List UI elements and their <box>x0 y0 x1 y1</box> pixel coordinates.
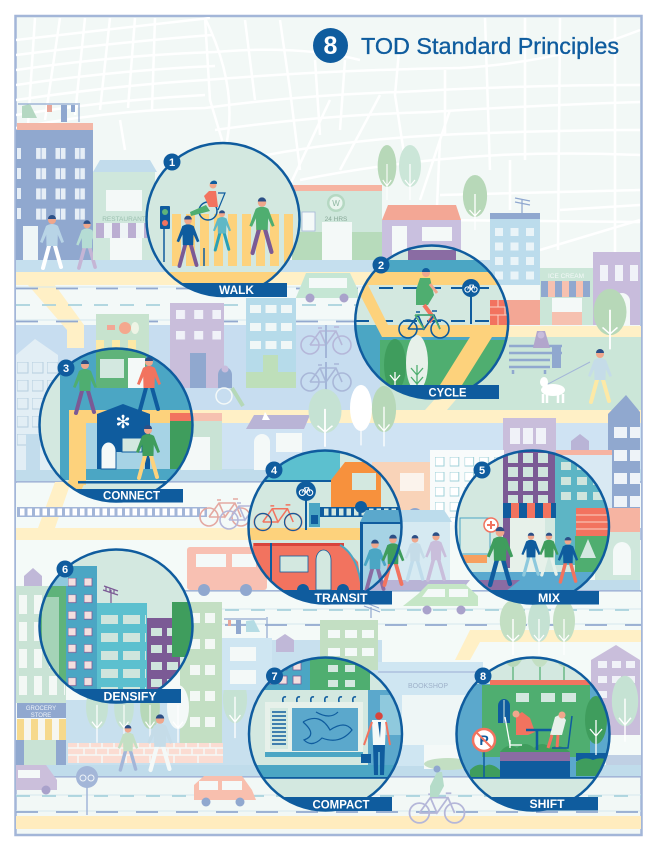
building: peach roof right block <box>556 450 640 590</box>
passengers waiting <box>364 535 404 590</box>
van: lilac <box>16 765 57 794</box>
building: cafe <box>96 314 149 360</box>
building: ice cream shop: ICE CREAM <box>548 273 584 280</box>
badge <box>474 462 490 478</box>
grocery store: GROCERY <box>26 706 56 712</box>
building: 24 hour shop: W <box>332 199 340 208</box>
badge <box>266 668 283 684</box>
label: MIX <box>538 591 560 605</box>
building: light blue block with green steps <box>246 298 296 388</box>
icon: no parking sign <box>473 729 495 777</box>
cyclist on bottom road <box>410 766 464 823</box>
badge <box>164 154 180 170</box>
badge <box>474 668 492 684</box>
label bar <box>325 797 392 811</box>
outline <box>146 143 300 296</box>
outline <box>456 658 610 810</box>
cyclist <box>399 268 449 338</box>
antenna mid <box>364 603 380 618</box>
person at door <box>137 357 161 410</box>
building: navy tall block <box>608 395 640 590</box>
label bar <box>431 385 499 399</box>
outline <box>40 348 192 502</box>
people in mixed use street <box>487 527 596 585</box>
building: white house left <box>16 339 60 470</box>
outline <box>248 450 402 604</box>
outline <box>456 450 609 604</box>
building: purple top <box>503 418 589 458</box>
street map background <box>16 18 640 260</box>
building: green tall right <box>180 602 222 763</box>
building: green tall left <box>16 568 66 703</box>
house with purple roof <box>246 412 310 470</box>
panel 8: shift <box>455 656 611 812</box>
van: pink <box>194 776 256 806</box>
building: pale blue block lower <box>222 620 378 690</box>
people: couple holding hands <box>40 215 98 268</box>
dog walker <box>540 349 612 403</box>
building: lilac pitched right <box>591 645 641 765</box>
brick wall <box>68 743 223 763</box>
elderly man with cane <box>177 216 204 266</box>
cafe table with two diners <box>505 710 572 750</box>
label: COMPACT <box>312 798 370 812</box>
trees by brick wall <box>86 685 189 743</box>
label: DENSIFY <box>104 690 156 704</box>
car: green lower road <box>403 584 478 614</box>
label: SHIFT <box>530 797 565 811</box>
building: rooftop laundry <box>18 103 79 122</box>
bike parking outside transit <box>200 499 270 529</box>
label bar <box>325 591 392 604</box>
building: purple apartment <box>170 303 224 388</box>
label: WALK <box>219 283 254 297</box>
rail track <box>17 507 207 517</box>
outline <box>249 658 402 810</box>
street bands <box>16 260 641 829</box>
grocery store <box>16 703 66 765</box>
building: restaurant: RESTAURANT <box>102 216 146 223</box>
building: blue apartment block <box>16 123 93 260</box>
panel 2: cycle <box>354 244 510 400</box>
label: CONNECT <box>103 488 161 502</box>
panel 3: connect <box>38 347 194 503</box>
trees near shop <box>378 145 487 230</box>
icon: kiosk with snowflake <box>97 404 150 469</box>
label bar <box>116 689 181 703</box>
building: grid block <box>430 450 504 525</box>
person in wheelchair <box>190 181 225 220</box>
badge: 4 <box>271 465 278 477</box>
car: green upper road <box>295 273 358 302</box>
badge <box>56 560 74 578</box>
bookshop <box>378 662 483 770</box>
sidewalk and yellow path row 1 <box>16 260 540 272</box>
badge: 8 <box>480 671 486 683</box>
badge: 7 <box>271 671 278 683</box>
building: restaurant <box>93 160 157 260</box>
traffic signal <box>160 206 170 262</box>
panel 4: transit <box>245 448 408 608</box>
label bar <box>116 489 183 502</box>
title badge <box>313 28 348 63</box>
label bar <box>223 283 287 297</box>
icon: kiosk with snowflake: ✻ <box>115 412 131 432</box>
person in green coat <box>136 425 160 478</box>
panel 7: compact <box>245 655 408 815</box>
building: blue block with antenna <box>490 198 540 286</box>
title: TOD Standard Principles <box>361 33 619 59</box>
bicycles in red <box>254 505 302 531</box>
building: 24 hour shop <box>292 185 382 260</box>
grocery store: STORE <box>31 713 51 719</box>
badge: 6 <box>62 564 68 576</box>
sign: bike <box>462 279 480 324</box>
badge <box>266 462 282 478</box>
street trees centre <box>308 385 396 447</box>
park bench with sitter <box>509 331 562 374</box>
badge: 2 <box>378 260 384 272</box>
label bar <box>532 591 599 604</box>
road markings <box>16 287 641 812</box>
label bar <box>533 797 598 810</box>
outline <box>355 246 508 398</box>
panel 5: mix <box>452 448 614 608</box>
adult walking <box>249 197 275 253</box>
panel 1: walk <box>145 142 301 298</box>
laundry line <box>224 617 267 638</box>
outline <box>40 550 192 702</box>
tree single <box>223 675 247 738</box>
icon: no parking sign: P <box>479 732 489 748</box>
building: green shop behind connect <box>170 413 222 470</box>
badge: 5 <box>479 465 485 477</box>
building: ice cream shop <box>490 268 593 325</box>
building: 24 hour shop: 24 HRS <box>325 216 348 223</box>
badge <box>372 256 390 274</box>
sign and ticket machine <box>296 481 320 530</box>
antenna <box>103 586 118 603</box>
bus: pink <box>187 547 267 596</box>
tree in park <box>594 289 626 349</box>
sign: bike route <box>76 766 98 815</box>
person in wheelchair <box>216 366 243 406</box>
trees top right lower <box>500 600 575 655</box>
yellow diagonal paths <box>28 285 641 660</box>
man in suit with briefcase <box>361 712 390 775</box>
bookshop: BOOKSHOP <box>408 683 448 690</box>
label: TRANSIT <box>314 591 368 605</box>
building: purple block right <box>593 252 640 325</box>
bicycle racks <box>301 325 351 395</box>
label: CYCLE <box>428 386 466 400</box>
building: peach block <box>372 462 430 515</box>
bus stop shelter <box>360 510 470 590</box>
badge <box>58 360 74 376</box>
child walking <box>213 210 231 250</box>
panel 6: densify <box>38 548 194 704</box>
badge: 1 <box>169 157 175 169</box>
building: lilac shop with awning <box>382 205 461 260</box>
people walking by the wall <box>118 714 173 770</box>
badge: 3 <box>63 363 69 375</box>
person walking with bag <box>73 360 97 413</box>
title badge: 8 <box>324 32 338 60</box>
